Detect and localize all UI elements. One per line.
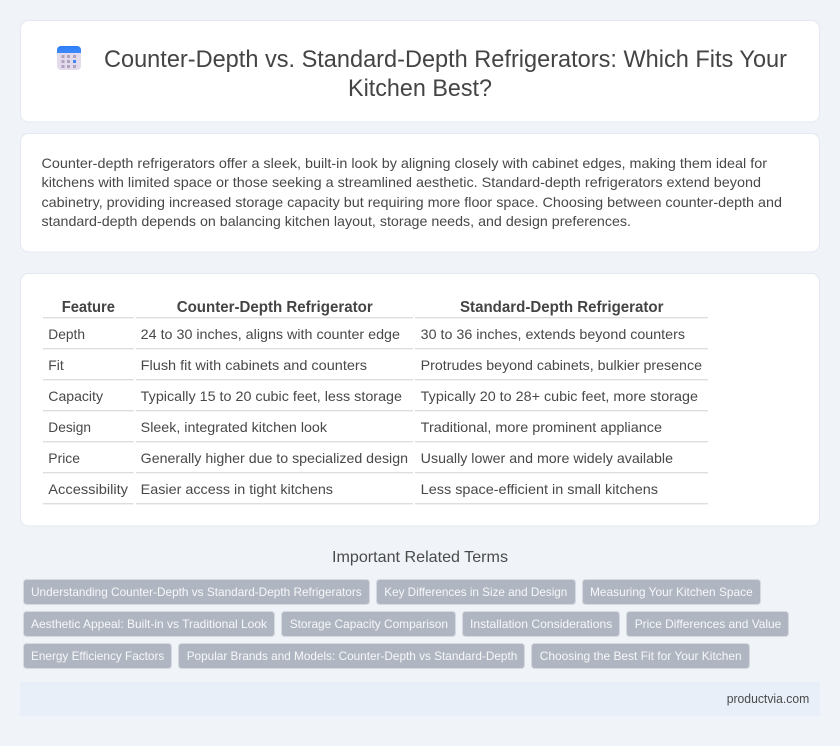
table row: design [48,419,662,435]
title: Counter-Depth vs. Standard-Depth Refrigerators: Which Fits Your [104,46,787,73]
tag: Price Differences and Value [635,617,782,631]
table row: depth: 30 to 36 inches, extends beyond counters [421,326,685,342]
tag [376,580,576,604]
tag [462,612,620,636]
panel: comparison table [20,274,820,526]
panel: introduction [20,134,820,252]
footer source text: productvia.com [727,692,809,706]
tag [24,644,172,668]
tag: Popular Brands and Models: Counter-Depth vs Standard-Depth [187,649,517,663]
table row: price: Generally higher due to specialized design [141,450,408,466]
table row: design: Sleek, integrated kitchen look [141,419,328,435]
table row: fit: Protrudes beyond cabinets, bulkier presence [421,357,702,373]
table header [62,299,663,316]
tag [24,612,274,636]
table row: price: Price [48,450,80,466]
table row: price: Usually lower and more widely available [421,450,673,466]
table row: accessibility: Less space-efficient in small kitchens [421,481,658,497]
tag [282,612,456,636]
tag: Key Differences in Size and Design [384,585,567,599]
table header: Feature [62,299,115,316]
heading: important related terms: Important Related Terms [332,549,508,566]
footer [20,682,820,716]
tag: Choosing the Best Fit for Your Kitchen [540,649,742,663]
table header: Standard-Depth Refrigerator [460,299,664,316]
title: Kitchen Best? [348,75,492,102]
table row: fit: Fit [48,357,64,373]
tag [626,612,788,636]
table row: fit: Flush fit with cabinets and counters [141,357,367,373]
icon: calendar [57,46,81,70]
tag [582,580,760,604]
tag: Installation Considerations [470,617,612,631]
table row: accessibility: Easier access in tight kitchens [141,481,333,497]
table row: accessibility: Accessibility [48,481,128,497]
table row: capacity [48,388,698,404]
tag: Storage Capacity Comparison [290,617,448,631]
text block: introduction paragraph [42,155,782,229]
title [104,46,787,102]
table row: depth: Depth [48,326,85,342]
table row: capacity: Typically 20 to 28+ cubic feet, more storage [421,388,698,404]
table row: depth [48,326,685,342]
panel: title header [20,20,820,122]
text block: introduction paragraph: cabinetry, providing increased storage capacity but requiring more floor space. Choosing between counter-depth and [42,194,782,210]
tag: Understanding Counter-Depth vs Standard-Depth Refrigerators [31,585,362,599]
tag [24,580,370,604]
table row: design: Design [48,419,91,435]
table row: depth: 24 to 30 inches, aligns with counter edge [141,326,400,342]
table row: accessibility [48,481,658,497]
panel: related term tags [24,580,788,668]
table row: design: Traditional, more prominent appliance [421,419,662,435]
text block: introduction paragraph: kitchens with limited space or those seeking a streamlined aesthetic. Standard-depth refrigerators extend beyond [42,174,761,190]
tag: Aesthetic Appeal: Built-in vs Traditional Look [31,617,268,631]
table row: capacity: Typically 15 to 20 cubic feet, less storage [141,388,402,404]
tag [178,644,524,668]
table header: Counter-Depth Refrigerator [177,299,373,316]
table row: price [48,450,673,466]
tag [532,644,750,668]
table row: capacity: Capacity [48,388,103,404]
table row: fit [48,357,702,373]
tag: Measuring Your Kitchen Space [590,585,753,599]
text block: introduction paragraph: standard-depth depends on balancing kitchen layout, storage needs, and design preferences. [42,213,631,229]
tag: Energy Efficiency Factors [31,649,164,663]
text block: introduction paragraph: Counter-depth refrigerators offer a sleek, built-in look by aligning closely with cabinet edges, making them ideal for [42,155,767,171]
